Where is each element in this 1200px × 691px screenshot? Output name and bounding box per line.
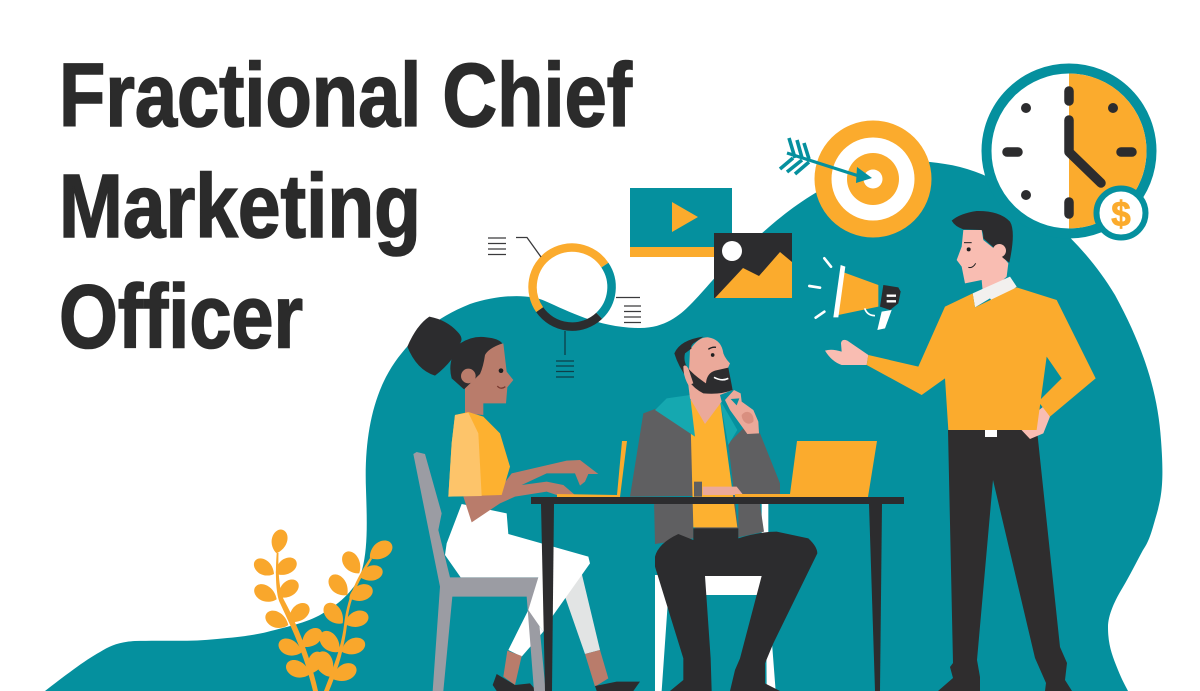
seated man jacket bbox=[630, 408, 780, 544]
icon: clock bbox=[986, 68, 1152, 234]
woman legs and shoes bbox=[493, 573, 640, 691]
title: Marketing bbox=[59, 157, 421, 257]
seated man trousers bbox=[655, 528, 817, 691]
person: seated man bbox=[630, 337, 817, 691]
seated man hand at chin bbox=[725, 390, 759, 434]
jacket lapels bbox=[655, 395, 737, 445]
chair bbox=[413, 452, 546, 691]
icon: dollar badge: $ bbox=[1111, 195, 1131, 234]
table bbox=[531, 497, 904, 691]
seated man shirt bbox=[690, 400, 737, 527]
woman hair bun bbox=[407, 317, 461, 376]
standing man collar bbox=[973, 277, 1017, 307]
icon: dollar badge bbox=[1096, 188, 1146, 238]
title: Officer bbox=[59, 268, 303, 368]
standing man hands bbox=[825, 340, 1050, 439]
icon: megaphone bbox=[809, 258, 901, 330]
person: woman at laptop bbox=[407, 317, 640, 691]
title: Fractional Chief bbox=[59, 46, 633, 146]
standing man trousers bbox=[938, 430, 1072, 691]
icon: donut chart with callouts bbox=[488, 238, 641, 377]
icon: plant leaves bbox=[251, 528, 396, 691]
icon: video player bbox=[630, 188, 732, 257]
seated man neck and head bbox=[688, 337, 733, 424]
teal background blob bbox=[45, 161, 1162, 691]
standing man sweater bbox=[867, 287, 1096, 430]
seated man hand on table bbox=[703, 487, 743, 495]
laptop: seated man bbox=[735, 441, 877, 497]
woman dress bbox=[445, 504, 590, 632]
title bbox=[59, 46, 633, 368]
white chair bbox=[655, 503, 776, 691]
person: standing man bbox=[825, 211, 1096, 691]
icon: image picture bbox=[714, 233, 792, 298]
laptop: woman bbox=[557, 441, 627, 497]
standing man head bbox=[957, 230, 1008, 298]
woman shirt bbox=[448, 412, 510, 497]
icon: target with arrow bbox=[780, 120, 932, 238]
woman arms bbox=[463, 460, 598, 522]
woman head bbox=[460, 343, 513, 415]
